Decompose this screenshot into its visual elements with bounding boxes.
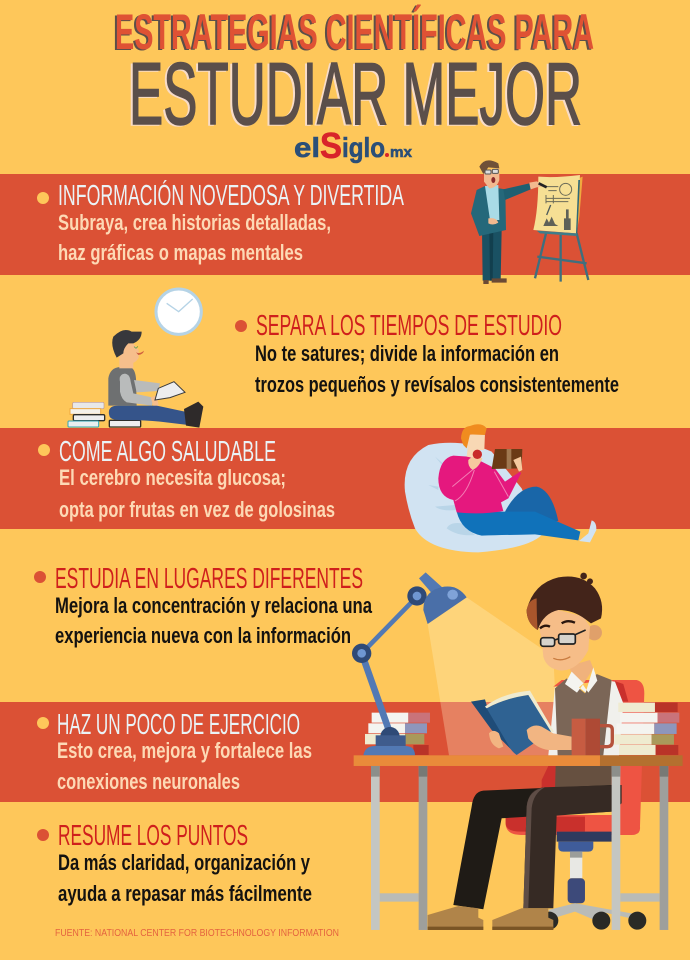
heading: ESTUDIA EN LUGARES DIFERENTES (55, 563, 363, 595)
bullet (235, 320, 247, 332)
bullet (37, 717, 49, 729)
beanbag (405, 443, 542, 552)
boy (108, 330, 203, 428)
body line 1: Da más claridad, organización y (58, 850, 311, 875)
man (438, 424, 596, 542)
hands (489, 731, 503, 748)
body line 2: ayuda a repasar más fácilmente (58, 881, 312, 906)
body line 2: haz gráficas o mapas mentales (58, 240, 303, 265)
body line 1: El cerebro necesita glucosa; (59, 465, 286, 490)
logo: elSiglo.mx (294, 125, 413, 166)
body line 2: conexiones neuronales (57, 769, 240, 794)
section 1 text (37, 179, 404, 265)
easel (533, 175, 588, 282)
clock (156, 289, 201, 334)
desk legs rear (371, 766, 668, 930)
vest (555, 674, 612, 755)
book (471, 691, 554, 755)
face (537, 610, 590, 671)
bullet (37, 192, 49, 204)
ear (587, 625, 602, 640)
book (492, 449, 522, 469)
man (471, 160, 547, 284)
band: row 1 (0, 174, 690, 275)
body line 1: Esto crea, mejora y fortalece las (57, 738, 312, 763)
left book stack (365, 713, 430, 755)
body line 2: opta por frutas en vez de golosinas (59, 497, 335, 522)
apple (473, 450, 482, 459)
source note: FUENTE: NATIONAL CENTER FOR BIOTECHNOLOGY INFORMATION (55, 928, 339, 939)
open book (155, 382, 185, 400)
lamp light beam (428, 597, 558, 755)
glasses (541, 630, 586, 646)
logo: elSiglo.mx: iglo (342, 132, 385, 163)
heading: RESUME LOS PUNTOS (58, 820, 248, 852)
logo: elSiglo.mx: el (294, 132, 320, 163)
lower torso (555, 766, 612, 792)
band: row 5 (0, 702, 690, 802)
chair (506, 680, 646, 930)
section 6 text (37, 820, 312, 906)
illustration: boy reading with clock (68, 289, 203, 428)
desk lamp (352, 572, 467, 755)
section 4 text (34, 563, 373, 648)
bullet (34, 571, 46, 583)
title (115, 4, 594, 143)
body line 2: experiencia nueva con la información (55, 623, 351, 648)
illustration: student at desk with lamp (352, 572, 683, 930)
book stack (68, 402, 141, 427)
section 5 text (37, 709, 312, 794)
hair (527, 573, 602, 630)
collar (565, 667, 597, 693)
legs (505, 487, 558, 522)
illustration: presenter with easel (471, 160, 588, 284)
section 2 text (235, 310, 619, 397)
logo: elSiglo.mx: S (320, 125, 342, 166)
heading: INFORMACIÓN NOVEDOSA Y DIVERTIDA (58, 179, 404, 212)
trousers (453, 785, 612, 909)
neck (569, 660, 593, 684)
heading: HAZ UN POCO DE EJERCICIO (57, 709, 300, 741)
shoes (428, 906, 483, 930)
section 3 text (38, 436, 335, 522)
head (466, 433, 485, 458)
brows and smile (540, 621, 575, 628)
mug (572, 719, 612, 755)
shirt (548, 680, 623, 755)
body line 1: Subraya, crea historias detalladas, (58, 210, 331, 235)
right book stack (614, 703, 679, 755)
bullet (38, 444, 50, 456)
student (428, 573, 623, 930)
body line 1: Mejora la concentración y relaciona una (55, 593, 373, 618)
desk front leg (612, 766, 620, 930)
band: row 3 (0, 428, 690, 529)
torso (438, 456, 521, 513)
heading: COME ALGO SALUDABLE (59, 436, 276, 468)
bullet (37, 829, 49, 841)
desk top (354, 755, 683, 766)
logo: elSiglo.mx: mx (390, 144, 413, 161)
body line 1: No te satures; divide la información en (255, 341, 559, 366)
illustration: man on beanbag eating apple (405, 424, 596, 552)
